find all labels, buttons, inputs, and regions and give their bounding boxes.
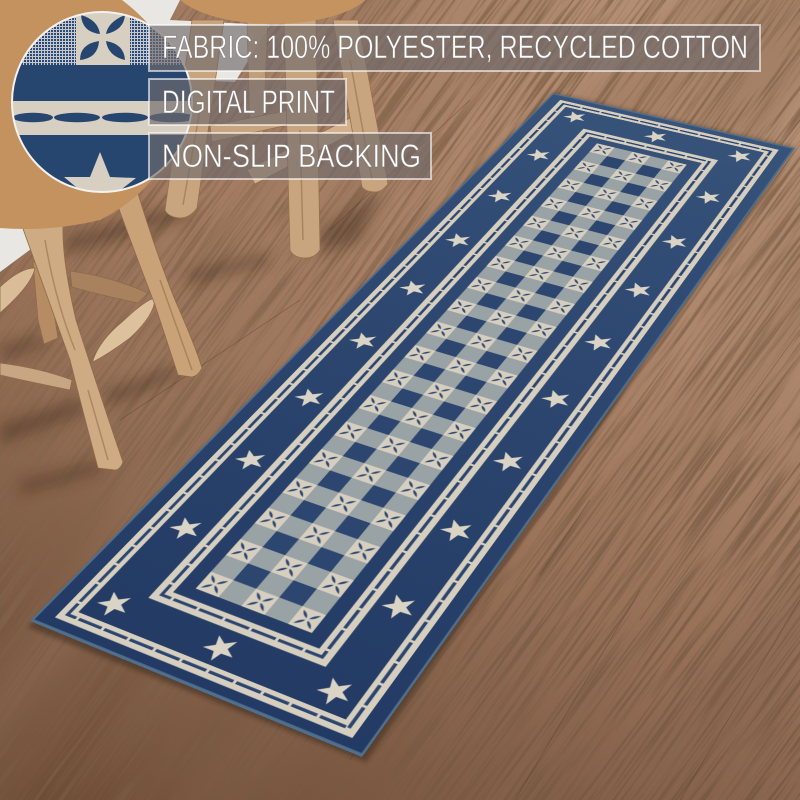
left stool xyxy=(0,0,202,470)
stool legs xyxy=(0,190,202,470)
label: non-slip backing: NON-SLIP BACKING xyxy=(162,138,421,174)
checked centre panel with petal motifs xyxy=(196,143,687,633)
petal motif xyxy=(80,15,125,60)
stars xyxy=(80,107,761,717)
label: non-slip backing xyxy=(149,133,431,179)
white wall behind stools xyxy=(0,0,270,272)
fabric close-up and labels xyxy=(11,11,761,193)
plank seams xyxy=(120,100,800,800)
outer double border xyxy=(67,103,771,729)
fabric close-up circle xyxy=(12,12,195,192)
floor shadows xyxy=(0,190,385,495)
right stool xyxy=(165,0,388,258)
inner double border xyxy=(161,133,710,658)
stool legs xyxy=(165,20,388,258)
rug binding and field xyxy=(30,93,795,757)
stool seat xyxy=(0,0,188,229)
rug xyxy=(30,93,795,757)
label: digital print xyxy=(149,79,346,125)
fabric star xyxy=(64,152,136,192)
label: digital print: DIGITAL PRINT xyxy=(162,84,335,120)
stool seat xyxy=(172,0,374,24)
